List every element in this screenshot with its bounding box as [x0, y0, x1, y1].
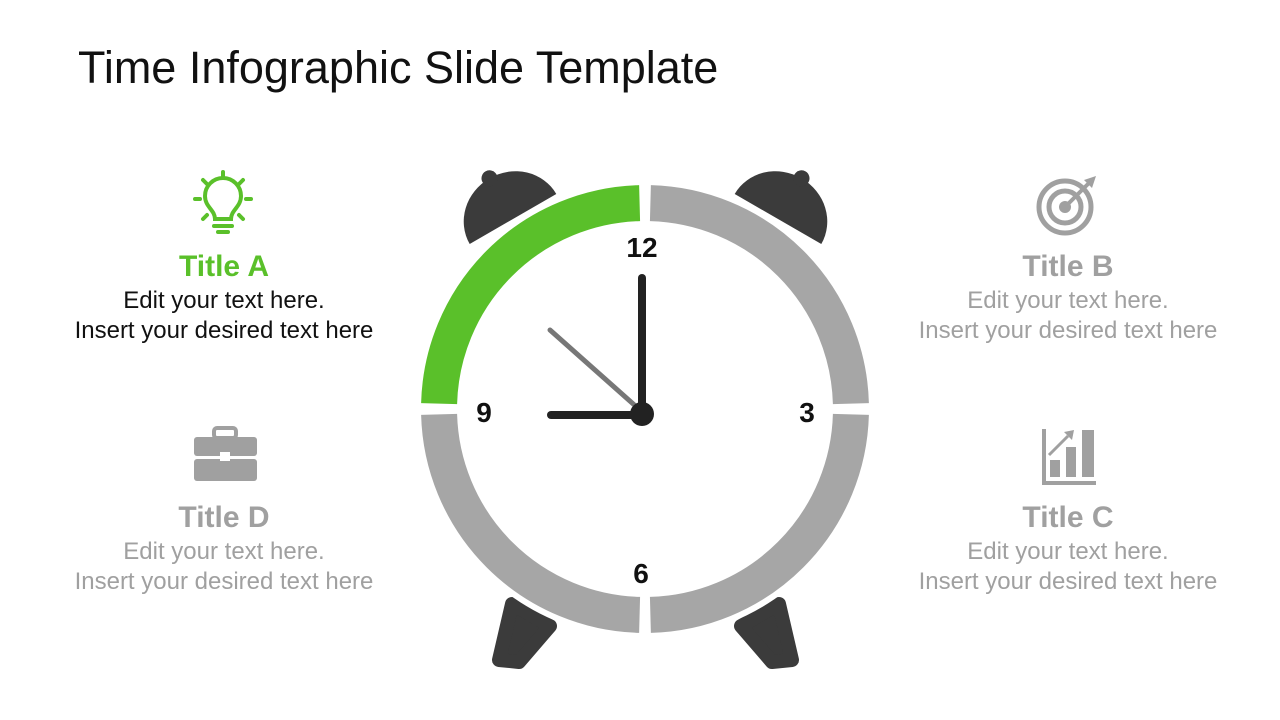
block: Title D: Edit your text here. — [123, 538, 325, 565]
icon: bar chart — [1042, 429, 1096, 485]
block: Title B: Title B — [1022, 250, 1114, 283]
block: Title B — [919, 250, 1217, 344]
icon: lightbulb — [195, 172, 251, 232]
clock numbers: 6 — [633, 558, 649, 589]
clock hands — [550, 278, 654, 426]
block: Title A: Title A — [179, 250, 269, 283]
clock numbers — [476, 232, 815, 589]
block: Title C: Insert your desired text here — [919, 568, 1217, 595]
block: Title A — [75, 250, 373, 344]
block: Title B: Edit your text here. — [967, 287, 1169, 314]
clock numbers: 9 — [476, 397, 492, 428]
clock numbers: 12 — [626, 232, 658, 263]
clock ring — [439, 203, 851, 615]
clock numbers: 3 — [799, 397, 815, 428]
block: Title A: Insert your desired text here — [75, 317, 373, 344]
icon: briefcase — [194, 428, 257, 481]
block: Title C: Edit your text here. — [967, 538, 1169, 565]
block: Title D: Insert your desired text here — [75, 568, 373, 595]
block: Title C: Title C — [1022, 501, 1114, 534]
block: Title D — [75, 501, 373, 595]
clock feet — [499, 604, 792, 662]
block: Title C — [919, 501, 1217, 595]
title: Time Infographic Slide Template — [78, 42, 718, 93]
icon: target — [1039, 176, 1096, 233]
block: Title B: Insert your desired text here — [919, 317, 1217, 344]
block: Title A: Edit your text here. — [123, 287, 325, 314]
block: Title D: Title D — [178, 501, 270, 534]
clock bells — [442, 146, 849, 244]
